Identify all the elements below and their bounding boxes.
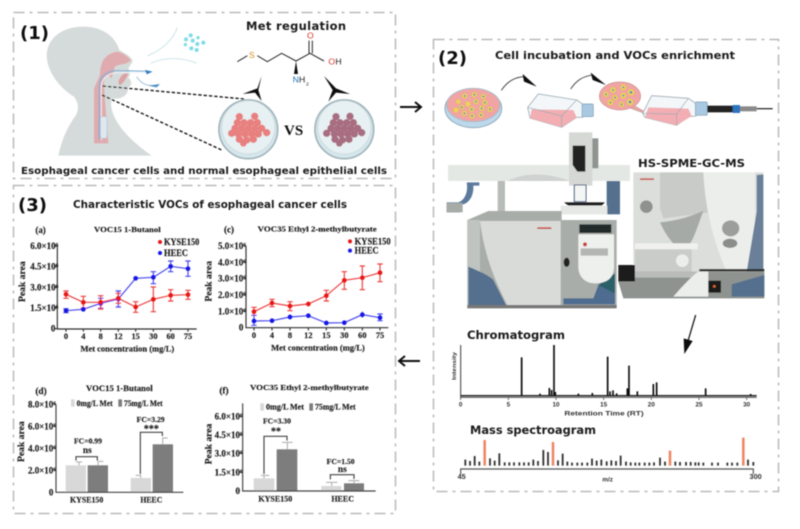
arrow: panel 2 to panel 3 xyxy=(399,356,420,366)
illustration: HS-SPME-GC-MS instrument xyxy=(447,132,764,308)
line chart (c): VOC35 Ethyl 2-methylbutyrate: 4.0×10⁶ xyxy=(218,257,246,267)
chart: chromatogram: 10 xyxy=(552,402,560,409)
bar chart (d): VOC15 1-Butanol: KYSE150 xyxy=(70,495,103,505)
heading: Cell incubation and VOCs enrichment: Cell incubation and VOCs enrichment xyxy=(495,50,735,62)
line chart (a): VOC15 1-Butanol: 8 xyxy=(99,332,103,341)
line chart (c): VOC35 Ethyl 2-methylbutyrate xyxy=(204,225,391,353)
bar chart (f): VOC35 Ethyl 2-methylbutyrate: 3.0×10⁶ xyxy=(215,448,243,458)
line chart (a): VOC15 1-Butanol: 0 xyxy=(51,324,56,334)
icon: normal cell dish xyxy=(315,100,374,159)
heading: Chromatogram: Chromatogram xyxy=(467,328,565,342)
bar chart (d): VOC15 1-Butanol: 0mg/L Met xyxy=(77,399,113,408)
icon: cancer cell dish xyxy=(219,100,278,159)
bar chart (f): VOC35 Ethyl 2-methylbutyrate: ** xyxy=(271,427,281,438)
bar chart (f): VOC35 Ethyl 2-methylbutyrate: KYSE150 xyxy=(258,493,292,503)
label: VS: VS xyxy=(284,123,303,139)
chart: chromatogram: Retention Time (RT) xyxy=(564,411,644,418)
icon: flask with SPME fiber xyxy=(643,96,773,125)
chart: chromatogram: Intensity xyxy=(452,351,458,380)
line chart (c): VOC35 Ethyl 2-methylbutyrate: Peak area xyxy=(204,261,214,302)
line chart (a): VOC15 1-Butanol: 6.0×10⁶ xyxy=(30,241,59,251)
panel: (2) Cell incubation and analysis xyxy=(434,40,778,492)
arrow: panel 1 to panel 2 xyxy=(400,102,421,112)
bar chart (d): VOC15 1-Butanol xyxy=(17,384,183,505)
dashed lines from esophagus to dish xyxy=(102,86,244,150)
bar chart (f): VOC35 Ethyl 2-methylbutyrate: 75mg/L Met xyxy=(315,402,356,411)
line chart (c): VOC35 Ethyl 2-methylbutyrate: 8 xyxy=(288,331,292,340)
bar chart (f): VOC35 Ethyl 2-methylbutyrate: 0mg/L Met xyxy=(266,402,304,411)
bar chart (d): VOC15 1-Butanol: 75mg/L Met xyxy=(124,399,163,408)
line chart (a): VOC15 1-Butanol xyxy=(18,225,200,353)
chemical structure: methionine: 2 xyxy=(306,81,309,87)
panel: (3) Characteristic VOCs xyxy=(14,186,396,514)
bar chart (f): VOC35 Ethyl 2-methylbutyrate: 6.0×10⁶ xyxy=(215,412,243,422)
line chart (c): VOC35 Ethyl 2-methylbutyrate: 5.0×10⁶ xyxy=(218,241,246,251)
bar chart (d): VOC15 1-Butanol: 4.0×10⁶ xyxy=(28,443,56,453)
bar chart (d): VOC15 1-Butanol: Peak area xyxy=(17,421,27,462)
line chart (a): VOC15 1-Butanol: 0 xyxy=(64,332,68,341)
chart: chromatogram xyxy=(452,345,757,418)
heading: (1): (1) xyxy=(20,23,49,44)
line chart (a): VOC15 1-Butanol: 4 xyxy=(81,332,86,341)
chemical structure: methionine: O xyxy=(328,56,335,66)
line chart (c): VOC35 Ethyl 2-methylbutyrate: (c) xyxy=(224,225,234,235)
line chart (c): VOC35 Ethyl 2-methylbutyrate: 12 xyxy=(304,331,312,340)
icon: cell magnification bubble xyxy=(599,82,652,116)
bar chart (d): VOC15 1-Butanol: VOC15 1-Butanol xyxy=(86,384,153,393)
heading: (3): (3) xyxy=(18,195,47,216)
line chart (a): VOC15 1-Butanol: 75 xyxy=(184,332,192,341)
chart: chromatogram: 5 xyxy=(507,402,511,409)
line chart (a): VOC15 1-Butanol: (a) xyxy=(35,225,46,235)
line chart (c): VOC35 Ethyl 2-methylbutyrate: KYSE150 xyxy=(355,236,391,246)
line chart (a): VOC15 1-Butanol: 12 xyxy=(114,332,122,341)
icon: exhaled breath and VOC particles xyxy=(147,27,205,63)
icon: culture flask xyxy=(528,94,593,127)
line chart (a): VOC15 1-Butanol: 30 xyxy=(149,332,157,341)
chart: mass spectrum: m/z xyxy=(602,476,613,483)
chart: chromatogram: 0 xyxy=(459,402,463,409)
arrow: curved to first flask xyxy=(501,74,537,90)
chart: mass spectrum: 300 xyxy=(750,472,762,481)
bar chart (d): VOC15 1-Butanol: 2.0×10⁶ xyxy=(28,465,56,475)
bar chart (f): VOC35 Ethyl 2-methylbutyrate: FC=1.50 xyxy=(327,457,355,466)
line chart (a): VOC15 1-Butanol: 15 xyxy=(132,332,140,341)
arrow: left arrowhead to cancer cells xyxy=(243,76,262,101)
bar chart (d): VOC15 1-Butanol: ns xyxy=(83,446,92,456)
chemical structure: methionine: O xyxy=(307,31,314,41)
chemical structure: methionine: H xyxy=(335,56,342,66)
bar chart (f): VOC35 Ethyl 2-methylbutyrate xyxy=(204,383,376,503)
line chart (c): VOC35 Ethyl 2-methylbutyrate: HEEC xyxy=(355,246,379,256)
line chart (c): VOC35 Ethyl 2-methylbutyrate: 0 xyxy=(252,331,256,340)
bar chart (d): VOC15 1-Butanol: FC=3.29 xyxy=(137,415,165,424)
line chart (c): VOC35 Ethyl 2-methylbutyrate: 75 xyxy=(376,331,384,340)
line chart (c): VOC35 Ethyl 2-methylbutyrate: 60 xyxy=(358,331,366,340)
line chart (a): VOC15 1-Butanol: 1.5×10⁶ xyxy=(30,303,59,313)
chart: mass spectrum xyxy=(458,438,762,483)
chart: mass spectrum: 45 xyxy=(458,472,466,481)
bar chart (f): VOC35 Ethyl 2-methylbutyrate: VOC35 Ethyl 2-methylbutyrate xyxy=(250,383,369,392)
label: HS-SPME-GC-MS: HS-SPME-GC-MS xyxy=(638,158,745,170)
chart: chromatogram: 30 xyxy=(743,402,751,409)
chart: chromatogram: 20 xyxy=(648,402,655,409)
line chart (c): VOC35 Ethyl 2-methylbutyrate: 4 xyxy=(270,331,275,340)
bar chart (f): VOC35 Ethyl 2-methylbutyrate: HEEC xyxy=(331,493,354,503)
chart: chromatogram: 25 xyxy=(695,402,703,409)
line chart (c): VOC35 Ethyl 2-methylbutyrate: 2.0×10⁶ xyxy=(218,290,246,300)
chemical structure: methionine xyxy=(237,31,342,87)
bar chart (f): VOC35 Ethyl 2-methylbutyrate: Peak area xyxy=(204,423,214,464)
line chart (a): VOC15 1-Butanol: KYSE150 xyxy=(164,237,200,247)
arrow: right arrowhead to normal cells xyxy=(324,76,350,102)
icon: petri dish with cells xyxy=(445,88,502,128)
heading: (2): (2) xyxy=(438,48,467,69)
line chart (a): VOC15 1-Butanol: Peak area xyxy=(18,261,28,302)
heading: Mass spectroagram: Mass spectroagram xyxy=(470,423,596,437)
line chart (a): VOC15 1-Butanol: 4.5×10⁶ xyxy=(30,262,59,272)
line chart (a): VOC15 1-Butanol: VOC15 1-Butanol xyxy=(94,225,161,234)
bar chart (f): VOC35 Ethyl 2-methylbutyrate: ns xyxy=(338,465,347,475)
line chart (c): VOC35 Ethyl 2-methylbutyrate: VOC35 Ethyl 2-methylbutyrate xyxy=(258,225,377,234)
bar chart (d): VOC15 1-Butanol: 6.0×10⁶ xyxy=(28,421,56,431)
bar chart (f): VOC35 Ethyl 2-methylbutyrate: 4.5×10⁶ xyxy=(215,430,243,440)
heading: Met regulation: Met regulation xyxy=(246,19,346,33)
bar chart (f): VOC35 Ethyl 2-methylbutyrate: (f) xyxy=(219,385,229,396)
line chart (c): VOC35 Ethyl 2-methylbutyrate: 0 xyxy=(239,323,244,333)
line chart (c): VOC35 Ethyl 2-methylbutyrate: 15 xyxy=(322,331,330,340)
line chart (a): VOC15 1-Butanol: 3.0×10⁶ xyxy=(30,282,59,292)
arrow: instrument to chromatogram xyxy=(684,315,696,354)
line chart (a): VOC15 1-Butanol: HEEC xyxy=(164,248,188,258)
chemical structure: methionine: N xyxy=(293,75,299,85)
bar chart (d): VOC15 1-Butanol: 0 xyxy=(49,487,54,497)
bar chart (f): VOC35 Ethyl 2-methylbutyrate: 1.5×10⁶ xyxy=(215,467,243,477)
caption: cell types: Esophageal cancer cells and normal esophageal epithelial cells xyxy=(21,166,387,177)
panel: (1) Met regulation xyxy=(14,12,396,178)
bar chart (d): VOC15 1-Butanol: 8.0×10⁶ xyxy=(28,399,56,409)
chemical structure: methionine: H xyxy=(299,75,305,85)
chemical structure: methionine: S xyxy=(249,50,255,60)
line chart (a): VOC15 1-Butanol: Met concentration (mg/L) xyxy=(80,343,174,353)
bar chart (f): VOC35 Ethyl 2-methylbutyrate: FC=3.30 xyxy=(263,417,291,426)
bar chart (d): VOC15 1-Butanol: FC=0.99 xyxy=(74,436,102,445)
line chart (c): VOC35 Ethyl 2-methylbutyrate: 30 xyxy=(340,331,348,340)
line chart (c): VOC35 Ethyl 2-methylbutyrate: 1.0×10⁶ xyxy=(218,306,246,316)
icon: human head with endoscope xyxy=(47,27,160,156)
bar chart (f): VOC35 Ethyl 2-methylbutyrate: 0 xyxy=(235,486,240,496)
line chart (c): VOC35 Ethyl 2-methylbutyrate: Met concentration (mg/L) xyxy=(271,343,365,353)
line chart (c): VOC35 Ethyl 2-methylbutyrate: 3.0×10⁶ xyxy=(218,274,246,284)
bar chart (d): VOC15 1-Butanol: (d) xyxy=(35,386,47,397)
heading: Characteristic VOCs of esophageal cancer cells: Characteristic VOCs of esophageal cancer cells xyxy=(73,198,347,211)
chart: chromatogram: 15 xyxy=(600,402,608,409)
line chart (a): VOC15 1-Butanol: 60 xyxy=(167,332,175,341)
arrow: curved to cell callout xyxy=(571,73,606,89)
bar chart (d): VOC15 1-Butanol: HEEC xyxy=(140,495,162,505)
bar chart (d): VOC15 1-Butanol: *** xyxy=(144,424,159,435)
